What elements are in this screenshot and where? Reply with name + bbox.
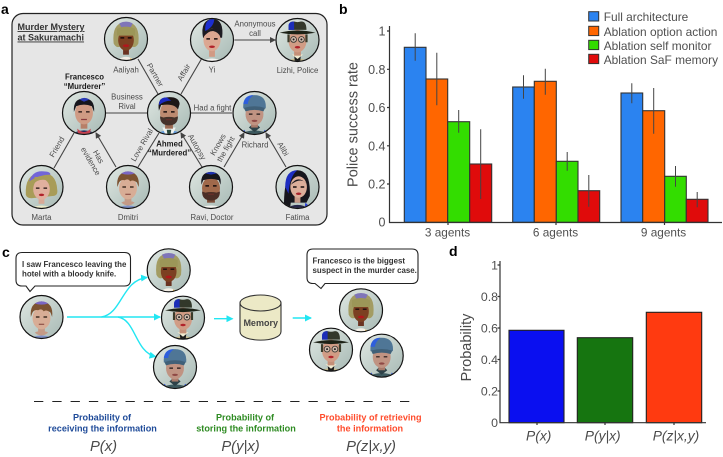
x tick labels: P(y|x) <box>585 429 621 444</box>
panel a title: at Sakuramachi <box>18 32 84 42</box>
relationship labels: call <box>249 29 261 38</box>
legend: Full architecture <box>604 10 689 24</box>
panel d: probability bar chart <box>459 258 706 444</box>
icon: Aaliyah avatar <box>104 18 148 64</box>
icon: Aaliyah retriever <box>340 289 382 335</box>
arrow from memory <box>293 317 311 319</box>
icon: Richard retriever <box>360 334 403 380</box>
y tick labels: 0.8 <box>368 63 386 77</box>
probability of storing: storing the information <box>196 424 296 434</box>
character names: Ravi, Doctor <box>191 213 234 222</box>
bars <box>404 47 708 222</box>
relationship labels: Partner <box>145 62 165 89</box>
character names: Fatima <box>286 213 310 222</box>
x tick labels: 9 agents <box>641 226 686 240</box>
icon: Ahmed avatar <box>148 92 190 138</box>
speech bubble: police conclusion: suspect in the murder case. <box>312 266 417 275</box>
icon: Yi avatar <box>190 18 234 65</box>
y tick labels: 0.4 <box>481 353 498 367</box>
relationship labels: Knows <box>208 132 228 157</box>
icon: Francesco avatar <box>62 92 106 138</box>
relationship labels: evidence <box>79 145 102 177</box>
speech bubble: witness statement <box>16 252 130 292</box>
character names <box>32 66 318 222</box>
y tick labels: 0.6 <box>481 322 498 336</box>
cyan arrows to receivers <box>67 278 160 356</box>
speech bubble: police conclusion <box>307 249 418 288</box>
character names: “Murdered” <box>148 148 191 158</box>
relationship labels: Friend <box>48 135 66 159</box>
x tick labels: P(z|x,y) <box>653 429 699 444</box>
arrow to memory <box>214 318 232 320</box>
y tick labels: 0.2 <box>481 384 498 398</box>
icon: Aaliyah receiver <box>147 249 190 295</box>
icon: memory cylinder: Memory <box>243 318 278 328</box>
y tick labels: 0.6 <box>368 101 386 115</box>
probability of storing: Probability of <box>216 413 275 423</box>
y tick labels: 0 <box>491 416 498 430</box>
y tick labels: 0.8 <box>481 290 498 304</box>
relationship labels: Love Rival <box>129 127 155 163</box>
relationship labels: Rival <box>118 102 136 111</box>
bars <box>509 312 702 423</box>
panel label c: c <box>2 244 10 260</box>
relationship labels: Has <box>91 148 106 165</box>
icon: Dmitri avatar <box>106 166 150 212</box>
y tick labels <box>368 24 386 230</box>
character names: Yi <box>209 66 216 74</box>
speech bubble: police conclusion: Francesco is the biggest <box>312 257 405 266</box>
panel c: information flow diagram <box>16 249 422 455</box>
icon: Marta avatar <box>20 166 63 212</box>
legend: Ablation option action <box>604 25 717 39</box>
panel label a: a <box>1 1 9 17</box>
icon: Lizhi receiver <box>162 296 204 342</box>
icon: Dmitri sender <box>20 296 63 342</box>
probability of storing <box>196 413 296 455</box>
panel b: police success rate bar chart <box>346 10 722 239</box>
x tick labels <box>425 226 686 240</box>
icon: Ravi avatar <box>190 166 232 212</box>
y tick labels: 1 <box>379 24 386 38</box>
character names: Dmitri <box>118 213 138 222</box>
panel a title: Murder Mystery <box>18 22 85 32</box>
probability of receiving <box>48 413 157 455</box>
panel a: relationship network <box>12 14 327 225</box>
legend: Ablation self monitor <box>604 39 711 53</box>
probability of retrieving: the information <box>337 424 403 434</box>
y tick labels: 0.2 <box>368 178 386 192</box>
icon: Fatima avatar <box>276 166 319 212</box>
relationship labels: Affair <box>176 62 193 83</box>
icon: Lizhi retriever <box>310 328 352 374</box>
x tick labels: 3 agents <box>425 226 470 240</box>
y tick labels: 0 <box>379 216 386 230</box>
probability of receiving: receiving the information <box>48 424 157 434</box>
axes <box>387 26 722 225</box>
relationship labels: the fight <box>215 134 237 164</box>
x tick labels <box>526 429 699 444</box>
character names: Aaliyah <box>113 66 139 74</box>
probability of receiving: P(x) <box>90 439 117 455</box>
panel label b: b <box>339 1 348 17</box>
x tick labels: P(x) <box>526 429 551 444</box>
character names: Marta <box>32 213 52 222</box>
x tick labels: 6 agents <box>533 226 578 240</box>
y tick labels <box>481 258 498 430</box>
y axis title: Probability <box>459 313 475 381</box>
probability of retrieving: Probability of retrieving <box>319 413 422 423</box>
error bars <box>415 33 697 207</box>
speech bubble: witness statement: I saw Francesco leaving the <box>22 260 127 269</box>
y axis title: Police success rate <box>346 62 362 187</box>
icon: Richard avatar <box>233 92 276 138</box>
axes <box>498 261 706 425</box>
relationship labels: Business <box>111 92 143 102</box>
character names: “Murderer” <box>64 82 105 91</box>
relationship labels: Anonymous <box>234 20 276 28</box>
relationship labels: Alibi <box>275 140 291 158</box>
icon: Richard receiver <box>154 346 196 392</box>
relationship labels: Had a fight <box>194 104 232 112</box>
relationship lines and arrows <box>54 40 286 168</box>
probability of receiving: Probability of <box>73 413 132 423</box>
relationship labels: Autopsy <box>186 133 208 162</box>
relationship labels <box>48 20 291 177</box>
probability of storing: P(y|x) <box>221 439 260 455</box>
y tick labels: 1 <box>491 258 498 272</box>
icon: Lizhi avatar <box>276 18 319 65</box>
speech bubble: witness statement: hotel with a bloody knife. <box>22 270 116 278</box>
legend <box>589 10 718 67</box>
y tick labels: 0.4 <box>368 139 386 153</box>
character names: Ahmed <box>156 140 183 148</box>
legend: Ablation SaF memory <box>604 53 718 67</box>
panel a title <box>18 22 85 42</box>
probability of retrieving: P(z|x,y) <box>346 439 396 455</box>
character names: Lizhi, Police <box>277 66 318 75</box>
panel label d: d <box>449 243 458 259</box>
character names: Richard <box>242 140 268 150</box>
icon: memory cylinder <box>240 295 281 340</box>
character names: Francesco <box>65 72 104 82</box>
probability of retrieving <box>319 413 422 455</box>
